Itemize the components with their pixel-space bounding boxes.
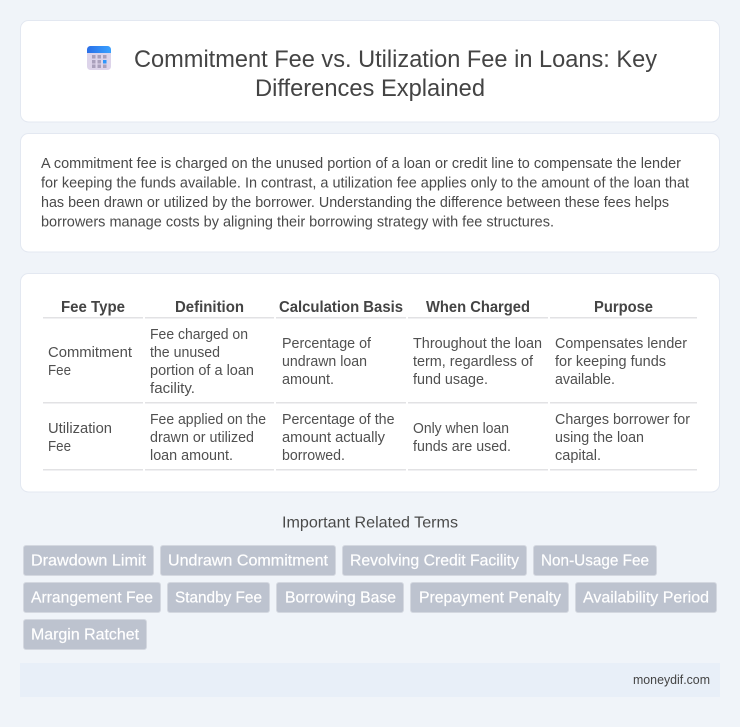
table row: utilization fee bbox=[43, 412, 697, 470]
table row: commitment fee: Commitment bbox=[48, 345, 132, 361]
footer bbox=[20, 663, 720, 697]
table row: commitment fee: amount. bbox=[282, 372, 334, 388]
related term tags: Standby Fee bbox=[175, 590, 262, 606]
table header row: Definition bbox=[175, 299, 244, 316]
related term tags: Prepayment Penalty bbox=[419, 590, 561, 606]
table row: commitment fee: term, regardless of bbox=[413, 354, 534, 370]
table row: utilization fee: amount actually bbox=[282, 430, 386, 446]
table header row bbox=[43, 299, 697, 318]
table row: utilization fee: Percentage of the bbox=[282, 412, 394, 428]
related term tags bbox=[24, 546, 716, 650]
title: Commitment Fee vs. Utilization Fee in Loans: Key bbox=[134, 46, 657, 73]
panel: comparison table bbox=[20, 274, 720, 492]
related term tags: Non-Usage Fee bbox=[541, 552, 649, 570]
table row: commitment fee: portion of a loan bbox=[150, 363, 254, 379]
related term tags: Margin Ratchet bbox=[31, 626, 140, 644]
table row: commitment fee: Throughout the loan bbox=[413, 336, 542, 352]
table row: utilization fee: Utilization bbox=[48, 421, 112, 437]
panel: intro paragraph: has been drawn or utilized by the borrower. Understanding the difference between these fees helps bbox=[41, 195, 669, 211]
table row: commitment fee: Fee bbox=[48, 363, 71, 379]
table row: utilization fee: Only when loan bbox=[413, 421, 509, 437]
table row: utilization fee: loan amount. bbox=[150, 448, 233, 464]
panel: header bbox=[20, 20, 720, 122]
table row: commitment fee: Percentage of bbox=[282, 336, 372, 352]
table row: commitment fee: undrawn loan bbox=[282, 354, 367, 370]
table row: utilization fee: using the loan bbox=[555, 430, 644, 446]
table row: commitment fee: Fee charged on bbox=[150, 327, 248, 343]
table row: utilization fee: borrowed. bbox=[282, 448, 345, 464]
table row: utilization fee: Charges borrower for bbox=[555, 412, 690, 428]
table row: utilization fee: drawn or utilized bbox=[150, 430, 254, 446]
table row: commitment fee: Compensates lender bbox=[555, 336, 687, 352]
table row: commitment fee: the unused bbox=[150, 345, 220, 361]
table header row: Calculation Basis bbox=[279, 299, 403, 316]
panel: intro paragraph: borrowers manage costs by aligning their borrowing strategy with fee structures. bbox=[41, 214, 554, 230]
footer: moneydif.com bbox=[633, 673, 710, 687]
heading: important related terms: Important Related Terms bbox=[282, 514, 458, 532]
related term tags: Drawdown Limit bbox=[31, 552, 147, 570]
table row: commitment fee: for keeping funds bbox=[555, 354, 666, 370]
table header row: Fee Type bbox=[61, 299, 125, 316]
panel: intro paragraph: for keeping the funds available. In contrast, a utilization fee applies only to the amount of the loan that bbox=[41, 176, 689, 192]
related term tags: Borrowing Base bbox=[285, 590, 396, 606]
table row: commitment fee: fund usage. bbox=[413, 372, 488, 388]
related term tags: Availability Period bbox=[583, 590, 709, 606]
table row: utilization fee: capital. bbox=[555, 448, 601, 464]
table row: utilization fee: Fee bbox=[48, 439, 71, 455]
related term tags: Undrawn Commitment bbox=[168, 552, 329, 570]
table row: utilization fee: Fee applied on the bbox=[150, 412, 266, 428]
table row: commitment fee bbox=[43, 327, 697, 404]
related term tags: Revolving Credit Facility bbox=[350, 552, 519, 570]
title: Differences Explained bbox=[255, 75, 485, 102]
table header row: Purpose bbox=[594, 299, 653, 316]
table row: commitment fee: facility. bbox=[150, 381, 195, 397]
related term tags: Arrangement Fee bbox=[31, 590, 153, 606]
icon: calendar bbox=[87, 46, 111, 70]
panel: intro paragraph: A commitment fee is charged on the unused portion of a loan or credit line to compensate the lender bbox=[41, 156, 681, 172]
title bbox=[134, 46, 657, 102]
panel: intro paragraph bbox=[20, 134, 720, 252]
table row: utilization fee: funds are used. bbox=[413, 439, 511, 455]
table row: commitment fee: available. bbox=[555, 372, 615, 388]
table header row: When Charged bbox=[426, 299, 530, 316]
